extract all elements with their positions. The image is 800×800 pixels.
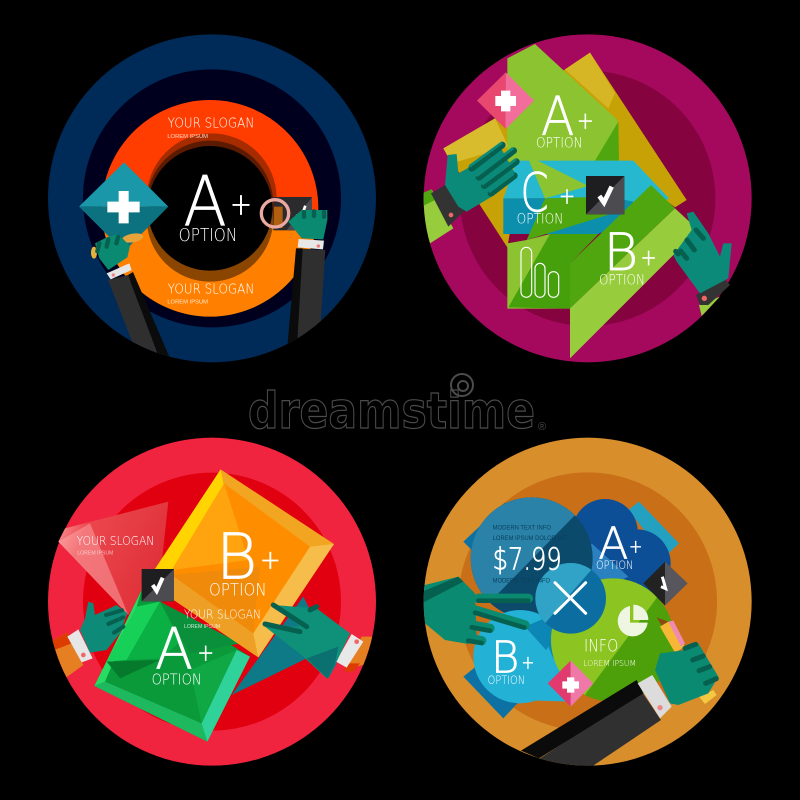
text: A+ option: OPTION <box>536 136 583 152</box>
hand: right holding ring <box>288 210 327 239</box>
arm: right sleeve and cuff <box>696 277 730 316</box>
icon: pie chart <box>618 605 648 636</box>
icon: pencil <box>657 617 717 704</box>
text: info <box>583 636 636 668</box>
green tab B <box>570 185 698 358</box>
icon: bar chart <box>521 247 559 297</box>
icon: check tile <box>586 176 624 214</box>
text: A+ option: A <box>598 519 628 569</box>
cyan B+ circle <box>473 610 572 703</box>
hand: left open <box>80 602 127 653</box>
text: B+ option: + <box>641 246 657 271</box>
text: price block: MODERN TEXT INFO <box>493 578 550 585</box>
centre black disc <box>148 146 272 271</box>
icon: check diamond <box>643 562 688 606</box>
text: B+ option <box>209 519 281 600</box>
text: B+ option <box>488 633 534 687</box>
text: B+ option: + <box>260 546 281 576</box>
panel: A+ B+ C+ folded green shapes on magenta circle <box>418 34 752 362</box>
text: info: LOREM IPSUM <box>583 658 636 668</box>
text: A+ option: OPTION <box>179 225 237 246</box>
panel: A+ ring on navy circle <box>48 34 376 362</box>
text: B+ option: B <box>604 223 638 283</box>
X circle <box>535 563 606 634</box>
text: A+ option: A <box>183 163 227 242</box>
text: top slogan <box>167 116 254 140</box>
text: top slogan: YOUR SLOGAN <box>168 116 254 131</box>
text: C+ option <box>517 161 575 228</box>
text: C+ option: OPTION <box>517 212 563 228</box>
text: A+ option: + <box>230 187 252 222</box>
teal sheet behind <box>232 597 337 695</box>
text: info: INFO <box>584 636 618 655</box>
icon: ring held by hand <box>261 200 289 227</box>
text: C+ option: C <box>520 161 549 224</box>
text: A+ option <box>536 85 594 152</box>
text: price block: MODERN TEXT INFO <box>493 524 551 531</box>
text: A+ option: A <box>155 616 193 682</box>
arm: left orange sleeve <box>52 629 93 678</box>
text: B+ option: OPTION <box>209 581 267 600</box>
outer navy circle <box>48 34 376 362</box>
inner dark circle <box>83 69 341 327</box>
inner dark circle <box>460 71 715 326</box>
panel: A+ B+ glossy squares on red circle <box>47 438 377 766</box>
outer magenta circle <box>424 34 752 362</box>
text: top slogan: LOREM IPSUM <box>167 134 208 140</box>
text: bottom slogan <box>167 282 254 306</box>
inner red circle <box>83 473 341 731</box>
arm: left <box>107 263 171 360</box>
hand: left holding ring <box>91 232 144 270</box>
icon: plus diamond <box>477 72 534 129</box>
arm: right orange sleeve <box>336 634 372 672</box>
green tab bars <box>507 234 598 309</box>
ring shadows <box>147 133 277 282</box>
text: bottom slogan: LOREM IPSUM <box>167 300 208 306</box>
yellow folded sheet <box>443 53 687 247</box>
icon: X mark <box>555 583 586 613</box>
green arrow inside C tab <box>527 155 618 240</box>
text: A+ option <box>152 616 214 688</box>
teal tab C <box>503 161 669 234</box>
arm: left green sleeve and cuff <box>424 185 464 244</box>
text: A+ option: + <box>197 639 214 667</box>
icon: plus diamond <box>548 661 593 707</box>
ring: two tone red and orange <box>100 97 323 322</box>
arm: right <box>287 239 325 347</box>
hand: right pointing <box>265 605 350 678</box>
hand: right open <box>673 212 732 293</box>
orange glossy square <box>147 469 334 657</box>
hand: left pointing <box>418 577 528 644</box>
text: price block: $7.99 <box>493 542 562 577</box>
panel: price and info circles on amber circle <box>418 438 752 767</box>
watermark: dreamstime logo <box>248 374 546 440</box>
text: top left slogan: YOUR SLOGAN <box>77 534 154 548</box>
icon: check tag behind hand <box>273 197 312 230</box>
text: watermark registered mark: ® <box>538 421 546 433</box>
text: A+ option <box>596 519 642 572</box>
text: B+ option: B <box>491 633 519 683</box>
text: C+ option: + <box>559 184 575 209</box>
blue price circle <box>468 497 595 620</box>
text: middle slogan: YOUR SLOGAN <box>184 608 261 622</box>
icon: plus diamond <box>79 162 168 252</box>
text: price block: LOREM IPSUM DOLOR SIT <box>493 535 567 542</box>
text: price block <box>493 524 567 585</box>
text: A+ option <box>179 163 252 246</box>
text: B+ option: OPTION <box>599 272 645 288</box>
text: middle slogan <box>184 608 261 630</box>
text: top left slogan: LOREM IPSUM <box>77 550 113 556</box>
text: A+ option: + <box>629 537 642 558</box>
text: top left slogan <box>77 534 154 556</box>
text: B+ option: B <box>216 519 257 593</box>
green glossy square <box>94 590 250 742</box>
text: middle slogan: LOREM IPSUM <box>184 624 220 630</box>
blue rotated tabs <box>463 502 679 718</box>
text: A+ option: OPTION <box>596 558 633 572</box>
text: A+ option: A <box>541 85 574 148</box>
green info circle <box>548 577 678 703</box>
text: B+ option <box>599 223 657 288</box>
green tab A <box>507 44 619 161</box>
text: bottom slogan: YOUR SLOGAN <box>168 282 254 297</box>
icon: check tile <box>142 569 174 601</box>
red glass triangle <box>58 502 168 615</box>
outer amber circle <box>424 438 752 766</box>
text: B+ option: + <box>522 653 534 673</box>
arm: lower right sleeve <box>521 675 672 767</box>
hand: left open <box>445 143 516 212</box>
text: A+ option: + <box>577 107 594 135</box>
text: watermark word: dreamstime <box>248 382 535 440</box>
navy cloud behind A+ <box>572 499 671 597</box>
outer red circle <box>48 438 376 766</box>
text: A+ option: OPTION <box>152 670 202 688</box>
icon: watermark spiral <box>451 374 473 396</box>
hand: holding pencil <box>655 643 718 705</box>
text: B+ option: OPTION <box>488 673 525 687</box>
inner amber circle <box>458 472 717 731</box>
